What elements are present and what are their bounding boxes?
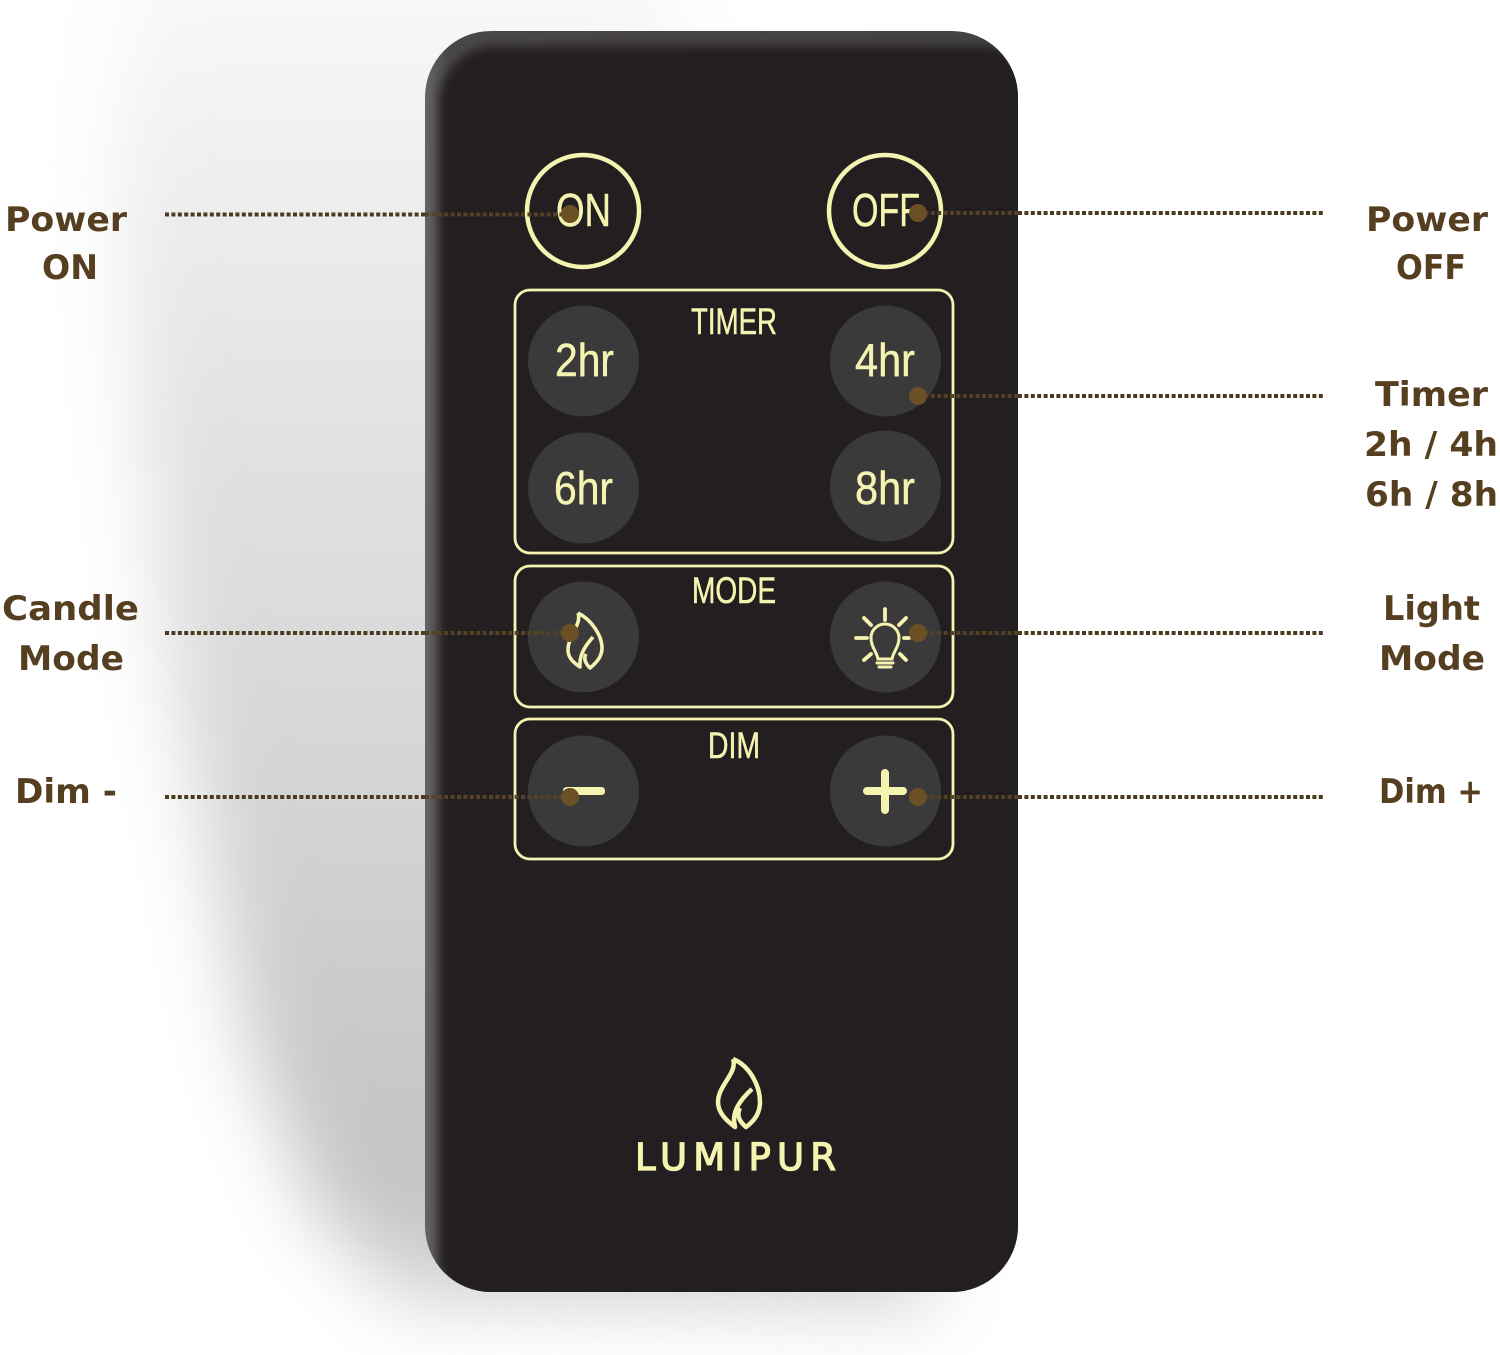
8hr button <box>830 430 941 542</box>
6hr button: 6hr <box>554 462 613 514</box>
leader line: candle mode <box>165 624 579 642</box>
leader line: dim plus <box>909 788 1323 806</box>
leader line: dim minus <box>165 788 579 806</box>
label: power on: Power <box>5 200 127 239</box>
power off button: OFF <box>852 184 920 236</box>
label: dim plus: Dim + <box>1379 772 1483 811</box>
icon: flame <box>568 613 602 668</box>
label: power off: OFF <box>1396 248 1466 287</box>
dim panel <box>515 719 953 859</box>
icon: light bulb <box>856 609 909 667</box>
6hr button <box>528 432 639 544</box>
label: power off <box>1366 200 1488 287</box>
candle mode button <box>528 582 639 692</box>
mode heading: MODE <box>692 570 776 611</box>
dim plus button <box>830 736 941 846</box>
leader line: light mode <box>909 624 1323 642</box>
label: power off: Power <box>1366 200 1488 239</box>
remote control body <box>425 31 1039 1316</box>
power on button <box>527 155 639 267</box>
label: light mode: Light <box>1383 589 1480 628</box>
label: candle mode <box>2 589 139 678</box>
timer panel <box>515 290 953 553</box>
label: dim minus: Dim - <box>15 772 117 811</box>
label: power on <box>5 200 127 287</box>
mode panel <box>515 566 953 707</box>
timer heading: TIMER <box>691 301 777 342</box>
2hr button: 2hr <box>555 334 614 386</box>
leader line: power on <box>165 205 579 223</box>
dim minus button <box>528 736 639 846</box>
icon: logo flame <box>718 1059 760 1127</box>
label: power on: ON <box>42 248 98 287</box>
label: timer: 2h / 4h <box>1364 425 1498 464</box>
label: timer: 6h / 8h <box>1365 475 1498 514</box>
brand name: LUMIPUR <box>635 1136 836 1179</box>
background drop shadow <box>115 0 940 1310</box>
leader line: timer <box>909 387 1323 405</box>
label: timer <box>1364 375 1498 514</box>
label: candle mode: Candle <box>2 589 139 628</box>
light mode button <box>830 582 941 692</box>
power off button <box>829 155 941 267</box>
label: timer: Timer <box>1375 375 1488 414</box>
2hr button <box>528 306 639 416</box>
4hr button: 4hr <box>855 334 915 386</box>
8hr button: 8hr <box>855 462 915 514</box>
4hr button <box>830 306 941 416</box>
label: light mode: Mode <box>1379 639 1485 678</box>
label: light mode <box>1379 589 1485 678</box>
label: candle mode: Mode <box>18 639 124 678</box>
brand logo <box>635 1059 836 1179</box>
power on button: ON <box>556 184 611 236</box>
leader line: power off <box>909 204 1323 222</box>
dim heading: DIM <box>708 725 760 766</box>
